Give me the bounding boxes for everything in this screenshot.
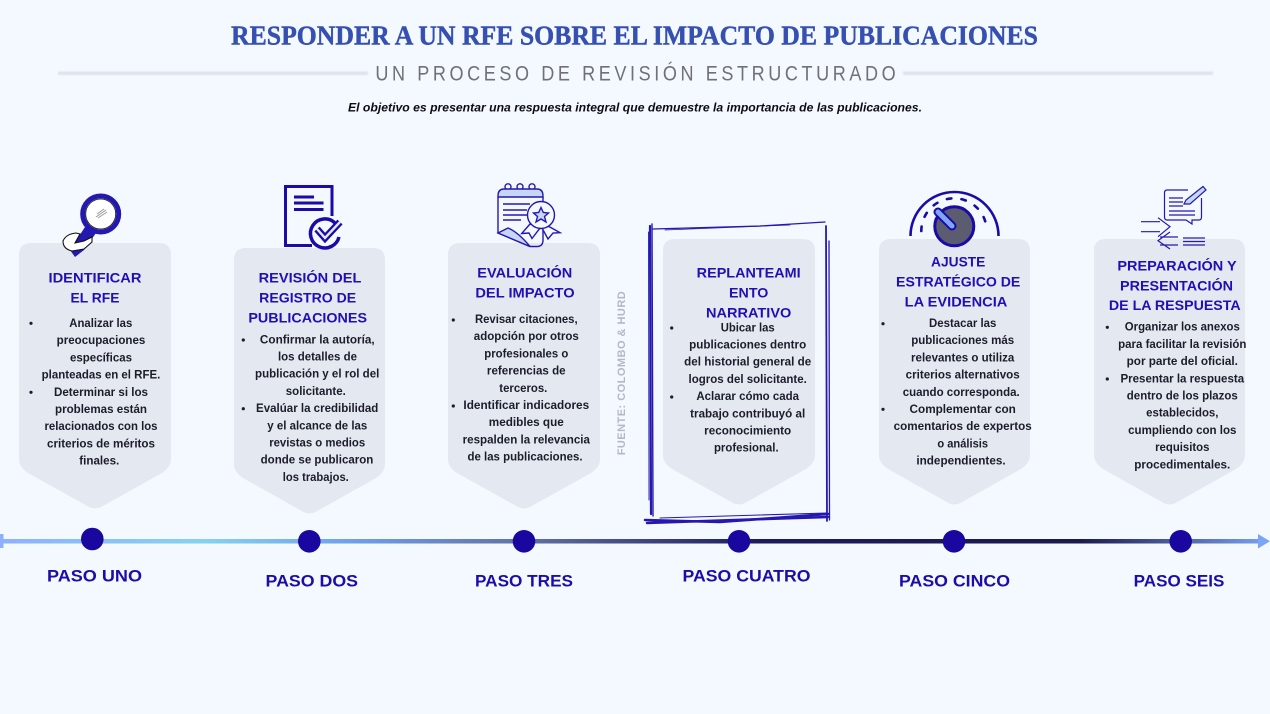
label: paso cuatro: PASO CUATRO xyxy=(682,568,811,586)
panel: step three xyxy=(448,243,600,508)
panel: step two xyxy=(234,248,385,514)
bullet list: Organizar los anexos xyxy=(1125,322,1240,334)
heading: LA EVIDENCIA xyxy=(905,294,1007,310)
panel: step five xyxy=(879,239,1032,504)
bullet list: reconocimiento xyxy=(704,426,791,438)
panel: step six xyxy=(1094,239,1246,504)
heading: AJUSTE xyxy=(931,254,985,270)
label: paso seis: PASO SEIS xyxy=(1134,573,1224,591)
card shape xyxy=(663,239,815,504)
heading: PUBLICACIONES xyxy=(248,310,367,326)
heading xyxy=(697,265,801,320)
step marker one xyxy=(81,528,104,550)
bullet list: de las publicaciones. xyxy=(468,452,582,464)
bullet list: Destacar las xyxy=(929,318,996,330)
bullet list: Evalúar la credibilidad xyxy=(256,403,378,415)
bullet list: finales. xyxy=(79,456,119,468)
bullet list: o análisis xyxy=(937,438,988,450)
heading: PREPARACIÓN Y xyxy=(1117,256,1237,273)
bullet list: trabajo contribuyó al xyxy=(690,408,805,420)
bullet list: solicitante. xyxy=(286,386,346,398)
bullet list xyxy=(670,322,811,455)
bullet list: publicaciones más xyxy=(911,335,1014,347)
timeline line xyxy=(0,539,1262,544)
heading: REPLANTEAMI xyxy=(697,265,801,281)
bullet list: Presentar la respuesta xyxy=(1120,373,1245,385)
icon: dial gauge xyxy=(910,192,998,246)
heading: REGISTRO DE xyxy=(259,290,356,306)
heading xyxy=(248,268,367,326)
label: paso dos: PASO DOS xyxy=(266,573,358,591)
bullet list xyxy=(242,334,379,484)
bullet list xyxy=(1106,322,1246,471)
heading: ESTRATÉGICO DE xyxy=(896,274,1020,290)
bullet list: Analizar las xyxy=(69,318,132,330)
bullet list: y el alcance de las xyxy=(267,420,367,432)
step marker four xyxy=(728,530,750,553)
step marker two xyxy=(298,530,321,553)
bullet list: requisitos xyxy=(1155,442,1209,454)
bullet list: Revisar citaciones, xyxy=(475,314,578,326)
card shape xyxy=(234,248,385,514)
bullet list: Complementar con xyxy=(910,404,1016,416)
heading: REVISIÓN DEL xyxy=(259,268,362,286)
step marker three xyxy=(513,530,535,553)
bullet list: Identificar indicadores xyxy=(463,400,589,412)
bullet list: cuando corresponda. xyxy=(903,387,1020,399)
hand-drawn frame around step four xyxy=(645,222,830,523)
subtitle: UN PROCESO DE REVISIÓN ESTRUCTURADO xyxy=(375,61,896,86)
bullet list: revistas o medios xyxy=(269,438,365,450)
heading: ENTO xyxy=(729,285,768,301)
heading xyxy=(48,270,142,306)
timeline arrowhead xyxy=(1258,534,1270,548)
bullet list: respalden la relevancia xyxy=(463,434,591,446)
heading: EL RFE xyxy=(70,290,120,306)
bullet list: específicas xyxy=(70,352,132,364)
bullet list: criterios de méritos xyxy=(47,438,155,450)
heading xyxy=(475,264,575,301)
bullet list: criterios alternativos xyxy=(906,370,1020,382)
timeline start cap xyxy=(0,534,4,548)
heading: EVALUACIÓN xyxy=(477,264,572,281)
bullet list: Ubicar las xyxy=(721,322,775,334)
bullet list: Determinar si los xyxy=(54,387,148,399)
bullet list: independientes. xyxy=(916,456,1006,468)
heading: PRESENTACIÓN xyxy=(1120,276,1233,293)
bullet list: adopción por otros xyxy=(474,331,579,343)
heading xyxy=(896,254,1020,310)
bullet list: cumpliendo con los xyxy=(1128,425,1236,437)
heading xyxy=(1109,256,1241,313)
bullet list: dentro de los plazos xyxy=(1127,390,1238,402)
label: paso uno: PASO UNO xyxy=(47,568,142,586)
bullet list: preocupaciones xyxy=(57,335,145,347)
card shape xyxy=(448,243,600,508)
bullet list: publicación y el rol del xyxy=(255,369,379,381)
bullet list: los trabajos. xyxy=(283,472,349,484)
icon: magnifying glass in hand xyxy=(63,196,119,257)
bullet list: relevantes o utiliza xyxy=(911,352,1015,364)
heading: IDENTIFICAR xyxy=(48,270,142,286)
step marker six xyxy=(1169,530,1192,553)
heading: NARRATIVO xyxy=(706,304,791,320)
bullet list: los detalles de xyxy=(278,352,357,364)
step marker five xyxy=(943,530,965,553)
panel: step one xyxy=(19,243,171,508)
icon: document with check xyxy=(286,186,340,248)
title: RESPONDER A UN RFE SOBRE EL IMPACTO DE PUBLICACIONES xyxy=(231,20,1038,50)
bullet list: Confirmar la autoría, xyxy=(260,334,375,346)
bullet list: por parte del oficial. xyxy=(1127,356,1238,368)
bullet list: del historial general de xyxy=(684,357,811,369)
card shape xyxy=(19,243,171,508)
icon: calendar with award ribbon xyxy=(498,184,560,246)
source note: FUENTE: COLOMBO & HURD xyxy=(616,291,628,455)
bullet list xyxy=(452,314,591,464)
bullet list xyxy=(881,318,1032,468)
icon: document exchange xyxy=(1141,186,1206,249)
bullet list: Aclarar cómo cada xyxy=(696,391,800,403)
heading: DE LA RESPUESTA xyxy=(1109,297,1241,313)
panel: step four xyxy=(663,239,815,504)
heading: DEL IMPACTO xyxy=(475,285,575,301)
bullet list: relacionados con los xyxy=(44,421,158,433)
bullet list: medibles que xyxy=(489,417,564,429)
bullet list: terceros. xyxy=(499,383,547,395)
bullet list: establecidos, xyxy=(1146,408,1218,420)
card shape xyxy=(1094,239,1245,504)
bullet list: comentarios de expertos xyxy=(894,421,1032,433)
bullet list: profesional. xyxy=(714,443,779,455)
bullet list: problemas están xyxy=(55,404,147,416)
bullet list: planteadas en el RFE. xyxy=(42,370,160,382)
bullet list xyxy=(29,318,160,468)
bullet list: profesionales o xyxy=(484,348,568,360)
bullet list: publicaciones dentro xyxy=(689,340,806,352)
bullet list: referencias de xyxy=(487,366,566,378)
label: paso cinco: PASO CINCO xyxy=(899,573,1010,591)
bullet list: logros del solicitante. xyxy=(689,374,807,386)
timeline xyxy=(0,528,1270,553)
bullet list: donde se publicaron xyxy=(261,455,373,467)
bullet list: procedimentales. xyxy=(1134,459,1230,471)
label: paso tres: PASO TRES xyxy=(475,573,573,591)
card shape xyxy=(879,239,1030,504)
bullet list: para facilitar la revisión xyxy=(1118,339,1246,351)
objective statement: El objetivo es presentar una respuesta integral que demuestre la importancia de las publicaciones. xyxy=(348,102,922,114)
